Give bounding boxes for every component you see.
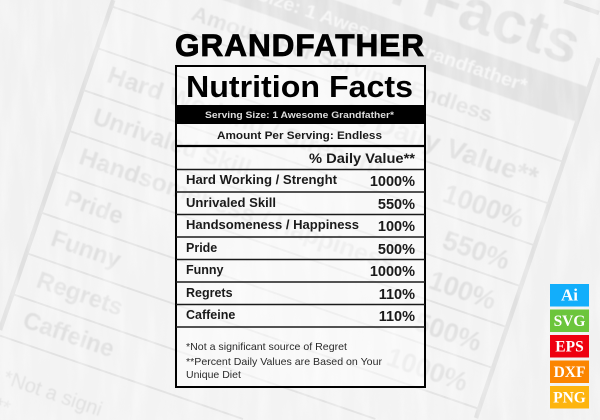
- row: Regrets: [186, 286, 415, 303]
- row: Unrivaled Skill: [186, 196, 415, 213]
- background: faded watermark text: Pride: [61, 185, 127, 230]
- serving size bar: Serving Size: 1 Awesome Grandfather*: [205, 110, 394, 121]
- panel: nutrition label: [176, 66, 425, 387]
- format badges: [550, 284, 589, 408]
- background: faded watermark text: Funny: [48, 225, 125, 274]
- background: faded watermark text: 1000%: [383, 342, 472, 397]
- row: Handsomeness / Happiness: 100%: [378, 219, 415, 235]
- background: faded watermark text: 100%: [425, 265, 500, 316]
- row: Hard Working / Strenght: 1000%: [370, 174, 415, 190]
- title: GRANDFATHER: [175, 27, 424, 63]
- badge: EPS: EPS: [555, 338, 584, 356]
- heading: Nutrition Facts: Nutrition Facts: [186, 69, 413, 104]
- footnotes: *Not a significant source of Regret: [186, 341, 347, 353]
- background: faded watermark text: Caffeine: [19, 307, 118, 363]
- badge: Ai: Ai: [561, 286, 578, 304]
- footnotes: [186, 341, 382, 381]
- background: faded watermark text: *Not a signi: [0, 367, 105, 420]
- amount per serving: Amount Per Serving: Endless: [217, 130, 382, 142]
- background: faded watermark text: Regrets: [33, 267, 126, 321]
- row: Unrivaled Skill: 550%: [378, 197, 415, 213]
- background: faded watermark text: Amount Per Serving: Endless: [189, 2, 496, 127]
- serving size bar: [176, 105, 425, 124]
- row: Hard Working / Strenght: Hard Working / Strenght: [186, 173, 338, 187]
- row: Regrets: Regrets: [186, 286, 233, 300]
- background: faded watermark text: Unrivaled Skill: [89, 103, 255, 183]
- label box: [176, 66, 425, 387]
- background: faded watermark text: % Daily Value**: [340, 98, 543, 192]
- row: Pride: 500%: [378, 242, 415, 258]
- row: Caffeine: [186, 308, 415, 325]
- footnotes: **Percent Daily Values are Based on Your: [186, 356, 382, 368]
- row: Caffeine: 110%: [379, 309, 415, 325]
- background: faded watermark text: Handsomeness / Happiness: [76, 143, 398, 277]
- row: Caffeine: Caffeine: [186, 308, 235, 322]
- row: Funny: 1000%: [370, 264, 415, 280]
- background: faded watermark text: 550%: [439, 225, 514, 276]
- footnotes: Unique Diet: [186, 369, 241, 381]
- row: Funny: Funny: [186, 263, 224, 277]
- row: Hard Working / Strenght: [186, 173, 415, 190]
- background: faded watermark text: Hard Working / Strenght: [104, 62, 387, 182]
- row: Handsomeness / Happiness: Handsomeness / Happiness: [186, 218, 359, 232]
- background: faded watermark text: 500%: [411, 307, 486, 357]
- row: Pride: Pride: [186, 241, 217, 255]
- badge: PNG: PNG: [553, 390, 586, 406]
- badge: SVG: SVG: [554, 313, 585, 330]
- background: faded watermark text: 1000%: [439, 178, 528, 234]
- row: Handsomeness / Happiness: [186, 218, 415, 235]
- row: Unrivaled Skill: Unrivaled Skill: [186, 196, 276, 210]
- row: Regrets: 110%: [379, 287, 415, 303]
- badge: DXF: DXF: [554, 364, 585, 381]
- row: Funny: [186, 263, 415, 280]
- row: Pride: [186, 241, 415, 258]
- daily value header: % Daily Value**: [309, 150, 416, 166]
